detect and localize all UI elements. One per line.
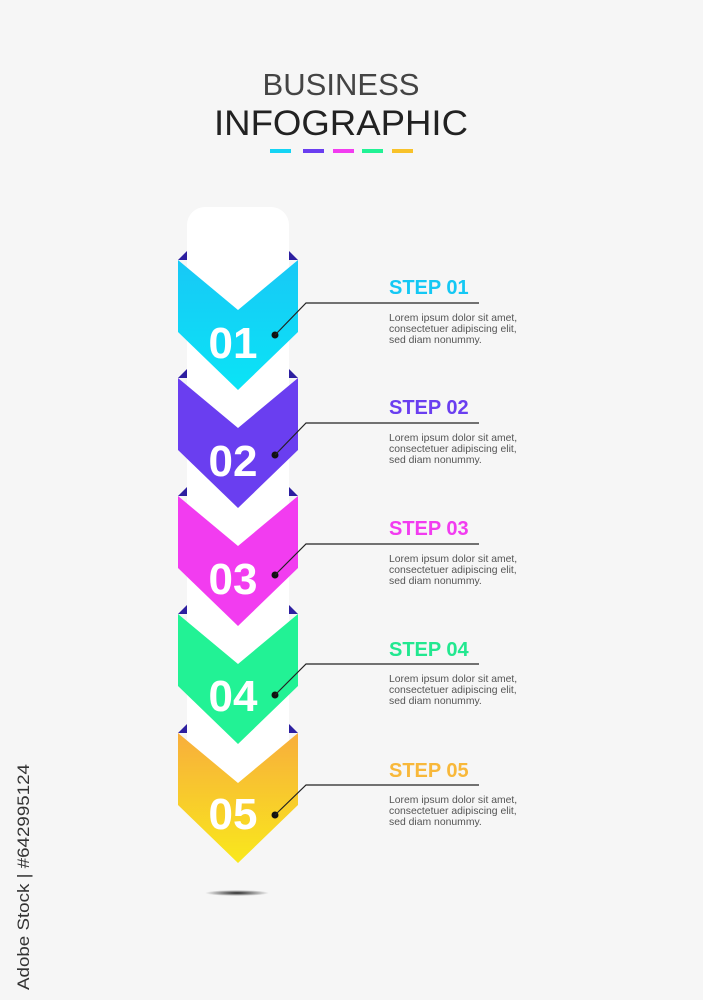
- step 3 text: [272, 518, 517, 587]
- step 5 chevron: 05: [209, 790, 257, 839]
- title: INFOGRAPHIC: [214, 104, 468, 143]
- color dashes: [270, 149, 413, 153]
- step 5 chevron: [178, 724, 298, 863]
- step 4 text: Lorem ipsum dolor sit amet,: [389, 674, 517, 685]
- step 4 text: consectetuer adipiscing elit,: [389, 685, 517, 696]
- step 4 text: [272, 639, 517, 707]
- step 1 text: sed diam nonummy.: [389, 335, 482, 346]
- step 5 text: [272, 760, 517, 828]
- step 3 text: STEP 03: [389, 518, 469, 540]
- step 3 chevron: [178, 487, 298, 626]
- step 2 text: STEP 02: [389, 397, 469, 419]
- step 3 text: sed diam nonummy.: [389, 576, 482, 587]
- step 4 chevron: 04: [209, 672, 258, 721]
- step 3 text: consectetuer adipiscing elit,: [389, 565, 517, 576]
- step 2 chevron: 02: [209, 437, 257, 486]
- step 1 text: STEP 01: [389, 277, 469, 299]
- step 5 text: Lorem ipsum dolor sit amet,: [389, 795, 517, 806]
- step 4 chevron: [178, 605, 298, 744]
- step 2 text: sed diam nonummy.: [389, 455, 482, 466]
- step 1 chevron: [178, 251, 298, 390]
- step 1 text: [272, 277, 517, 346]
- step 5 text: STEP 05: [389, 760, 469, 782]
- step 4 text: sed diam nonummy.: [389, 696, 482, 707]
- step 5 text: consectetuer adipiscing elit,: [389, 806, 517, 817]
- step 2 chevron: [178, 369, 298, 508]
- title: BUSINESS: [262, 67, 420, 102]
- step 2 text: [272, 397, 517, 466]
- step 3 text: Lorem ipsum dolor sit amet,: [389, 554, 517, 565]
- step 2 text: Lorem ipsum dolor sit amet,: [389, 433, 517, 444]
- step 2 text: consectetuer adipiscing elit,: [389, 444, 517, 455]
- step 4 text: STEP 04: [389, 639, 470, 661]
- stock id vertical: Adobe Stock | #642995124: [14, 764, 33, 990]
- step 1 text: consectetuer adipiscing elit,: [389, 324, 517, 335]
- step 5 text: sed diam nonummy.: [389, 817, 482, 828]
- shadow: [205, 890, 269, 896]
- step 1 text: Lorem ipsum dolor sit amet,: [389, 313, 517, 324]
- white column: [187, 207, 289, 792]
- step 3 chevron: 03: [209, 555, 257, 604]
- step 1 chevron: 01: [209, 319, 257, 368]
- title: [214, 67, 468, 143]
